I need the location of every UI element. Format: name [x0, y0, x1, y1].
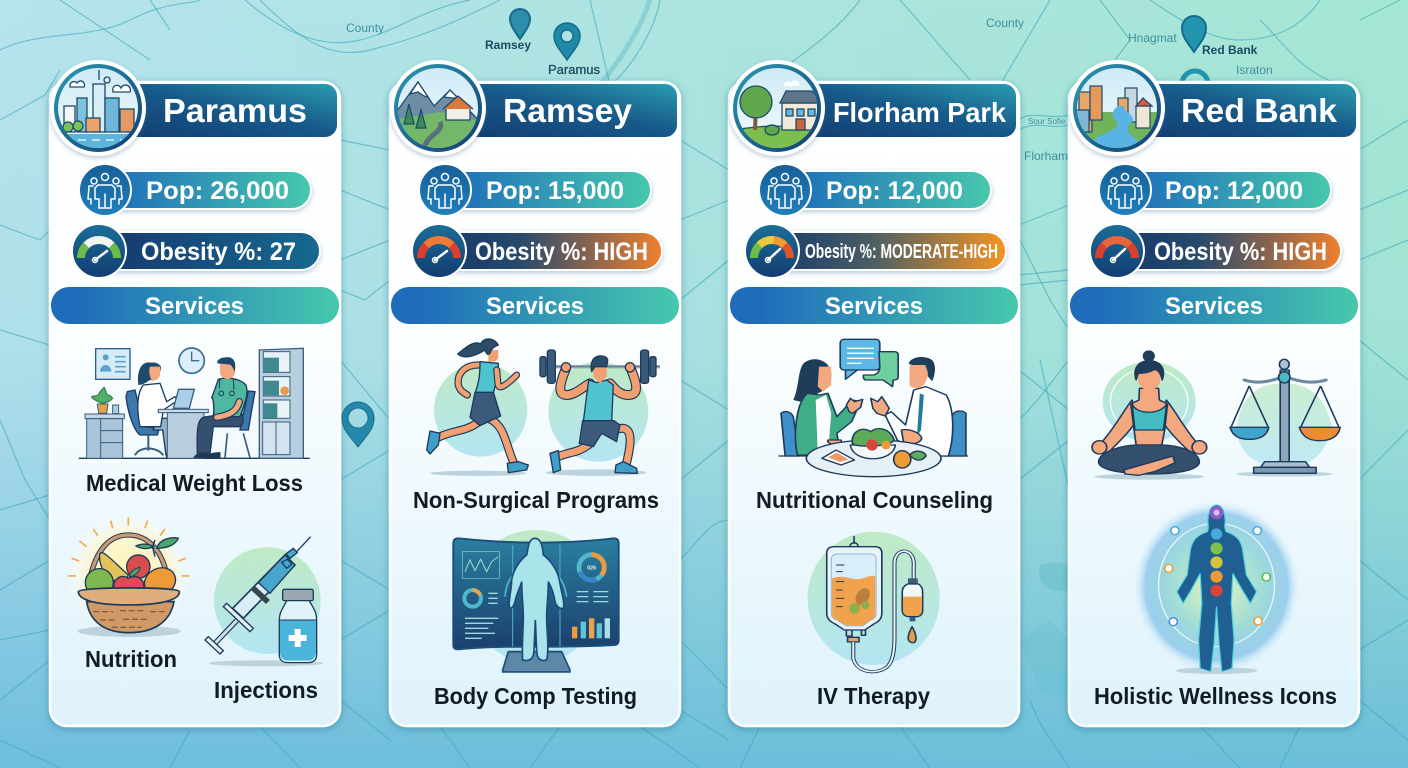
icon: people [419, 164, 471, 216]
obesity value: Obesity %: HIGH [475, 238, 648, 266]
illustration: fruit basket [67, 513, 190, 637]
service: injections [205, 537, 323, 703]
header bar: Paramus [96, 84, 337, 137]
icon: gauge [745, 224, 799, 278]
illustration: body composition dashboard: 026 [587, 565, 596, 571]
obesity pill [745, 224, 1006, 278]
population figure: Pop: 15,000 [486, 177, 624, 205]
illustration: runner and weightlifter [427, 339, 660, 476]
service: non-surgical programs [413, 339, 660, 513]
panel: Red Bank [1069, 60, 1359, 726]
town name: Florham Park [833, 97, 1006, 128]
map label: Sour Sofie: Sour Sofie [1028, 117, 1066, 126]
illustration: IV drip bag [808, 532, 940, 672]
services heading: Services [486, 293, 584, 320]
town name: Ramsey [503, 92, 633, 129]
icon: mountains and house [390, 60, 486, 156]
population pill [1099, 164, 1331, 216]
service label: IV Therapy [817, 683, 930, 709]
service: holistic wellness [1094, 500, 1337, 709]
service label: Medical Weight Loss [86, 470, 303, 496]
illustration: body composition dashboard [453, 530, 619, 672]
town name: Red Bank [1181, 92, 1338, 129]
population figure: Pop: 12,000 [826, 177, 963, 205]
map label: County west: County [346, 21, 384, 35]
service: nutrition [67, 513, 190, 672]
services bar [1070, 287, 1358, 324]
icon: gauge [412, 224, 466, 278]
panel: Paramus [50, 60, 340, 726]
map pin: centre left [342, 402, 374, 447]
header bar: Ramsey [436, 84, 677, 137]
panel: Florham Park [729, 60, 1019, 726]
map label: Hnagmat: Hnagmat [1128, 31, 1177, 45]
service: body comp testing [434, 530, 637, 709]
header bar: Red Bank [1115, 84, 1356, 137]
map label: Red Bank: Red Bank [1202, 43, 1258, 57]
service: meditation and balance [1092, 350, 1340, 480]
map pin: Red Bank [1182, 16, 1206, 52]
illustration: syringe and vial [205, 537, 323, 666]
service label: Injections [214, 677, 318, 703]
illustration: doctor and patient [79, 348, 309, 458]
map pin: partially hidden [1182, 71, 1208, 84]
map label: Israton: Israton [1236, 63, 1273, 77]
services heading: Services [1165, 293, 1263, 320]
icon: people [1099, 164, 1151, 216]
map label: Paramus: Paramus [548, 62, 601, 77]
illustration: counseling at a table [779, 339, 968, 477]
service label: Non-Surgical Programs [413, 487, 659, 513]
population pill [759, 164, 991, 216]
icon: gauge [1090, 224, 1144, 278]
icon: river and town [1069, 60, 1165, 156]
illustration: meditating woman [1092, 350, 1207, 480]
population pill [79, 164, 311, 216]
service label: Body Comp Testing [434, 683, 637, 709]
service: medical weight loss [79, 348, 309, 496]
obesity value: Obesity %: MODERATE-HIGH [805, 241, 998, 263]
illustration: balance scale [1230, 359, 1340, 477]
obesity pill [412, 224, 662, 278]
service label: Nutrition [85, 646, 177, 672]
obesity value: Obesity %: 27 [141, 238, 296, 266]
map label: County east: County [986, 16, 1024, 30]
header bar: Florham Park [775, 84, 1016, 137]
icon: people [759, 164, 811, 216]
map pin: Ramsey [510, 9, 530, 39]
panel: Ramsey [390, 60, 680, 726]
service label: Holistic Wellness Icons [1094, 683, 1337, 709]
map label: Ramsey: Ramsey [485, 38, 531, 52]
services bar [391, 287, 679, 324]
town name: Paramus [163, 92, 307, 129]
icon: people [79, 164, 131, 216]
service label: Nutritional Counseling [756, 487, 993, 513]
obesity pill [1090, 224, 1341, 278]
services bar [730, 287, 1018, 324]
map label: Florham: Florham [1024, 149, 1068, 163]
services heading: Services [145, 293, 244, 320]
services heading: Services [825, 293, 923, 320]
icon: city skyline [50, 60, 146, 156]
illustration: chakra body figure [1133, 500, 1300, 674]
icon: gauge [72, 224, 126, 278]
service: IV therapy [808, 532, 940, 709]
population pill [419, 164, 651, 216]
map pin: Paramus [554, 23, 580, 60]
population figure: Pop: 12,000 [1165, 177, 1303, 205]
obesity value: Obesity %: HIGH [1154, 238, 1327, 266]
obesity pill [72, 224, 320, 278]
population figure: Pop: 26,000 [146, 177, 289, 205]
services bar [51, 287, 339, 324]
service: nutritional counseling [756, 339, 993, 513]
icon: tree and house [729, 60, 825, 156]
